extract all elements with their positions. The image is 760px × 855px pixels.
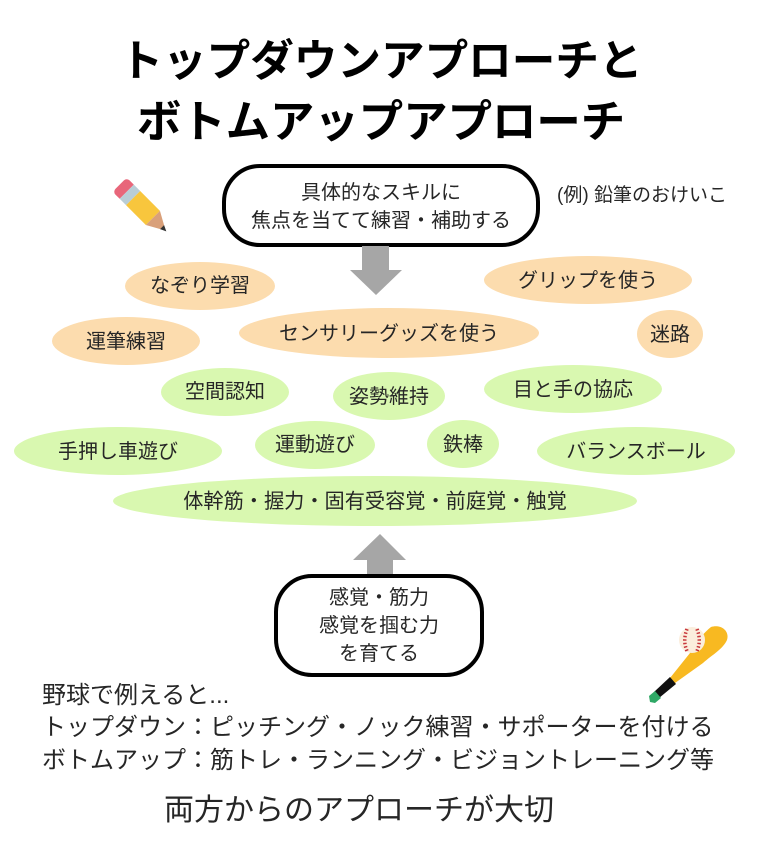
oval: sensory goods (239, 308, 539, 358)
baseball example text (42, 682, 714, 774)
icon: baseball and bat (649, 626, 728, 703)
conclusion: 両方からのアプローチが大切 (164, 794, 554, 827)
icon: pencil (113, 178, 173, 238)
oval: grip: グリップを使う (518, 269, 658, 292)
oval: body senses: 体幹筋・握力・固有受容覚・前庭覚・触覚 (183, 490, 567, 513)
bottom box: senses and strength (276, 576, 482, 675)
bottom box: senses and strength: 感覚を掴む力 (319, 614, 439, 637)
oval: sensory goods: センサリーグッズを使う (279, 322, 499, 345)
top box: specific skills: 具体的なスキルに (301, 181, 461, 204)
oval: wheelbarrow (14, 427, 222, 475)
bottom box: senses and strength: を育てる (339, 642, 419, 665)
arrow: down (350, 246, 402, 295)
top box: specific skills: 焦点を当てて練習・補助する (251, 209, 511, 232)
oval: movement play (255, 421, 375, 469)
oval: wheelbarrow: 手押し車遊び (58, 440, 178, 463)
oval: tracing: なぞり学習 (150, 274, 250, 297)
oval: body senses (113, 476, 637, 526)
arrow: up (353, 534, 406, 577)
oval: posture: 姿勢維持 (349, 385, 429, 408)
bottom box: senses and strength: 感覚・筋力 (329, 586, 429, 609)
oval: hand-eye (484, 365, 662, 413)
oval: grip (484, 256, 692, 304)
oval: balance ball: バランスボール (566, 440, 706, 463)
oval: maze (637, 310, 703, 358)
baseball example text: トップダウン：ピッチング・ノック練習・サポーターを付ける (42, 714, 714, 741)
oval: hand-eye: 目と手の協応 (513, 378, 633, 401)
baseball example text: ボトムアップ：筋トレ・ランニング・ビジョントレーニング等 (42, 747, 714, 774)
baseball example text: 野球で例えると... (42, 682, 229, 709)
oval: spatial cognition (161, 368, 289, 416)
oval: pen practice: 運筆練習 (86, 330, 166, 353)
oval: iron bar: 鉄棒 (443, 433, 483, 456)
title (119, 38, 643, 147)
oval: movement play: 運動遊び (275, 433, 355, 456)
title: ボトムアップアプローチ (137, 98, 625, 147)
oval: tracing (125, 262, 275, 310)
oval: balance ball (537, 427, 735, 475)
title: トップダウンアプローチと (119, 38, 643, 86)
oval: iron bar (427, 420, 499, 468)
oval: pen practice (52, 317, 200, 365)
oval: spatial cognition: 空間認知 (185, 380, 265, 403)
example label: (例) 鉛筆のおけいこ (557, 184, 727, 206)
top box: specific skills (224, 166, 538, 245)
oval: posture (333, 372, 445, 420)
oval: maze: 迷路 (650, 323, 690, 346)
